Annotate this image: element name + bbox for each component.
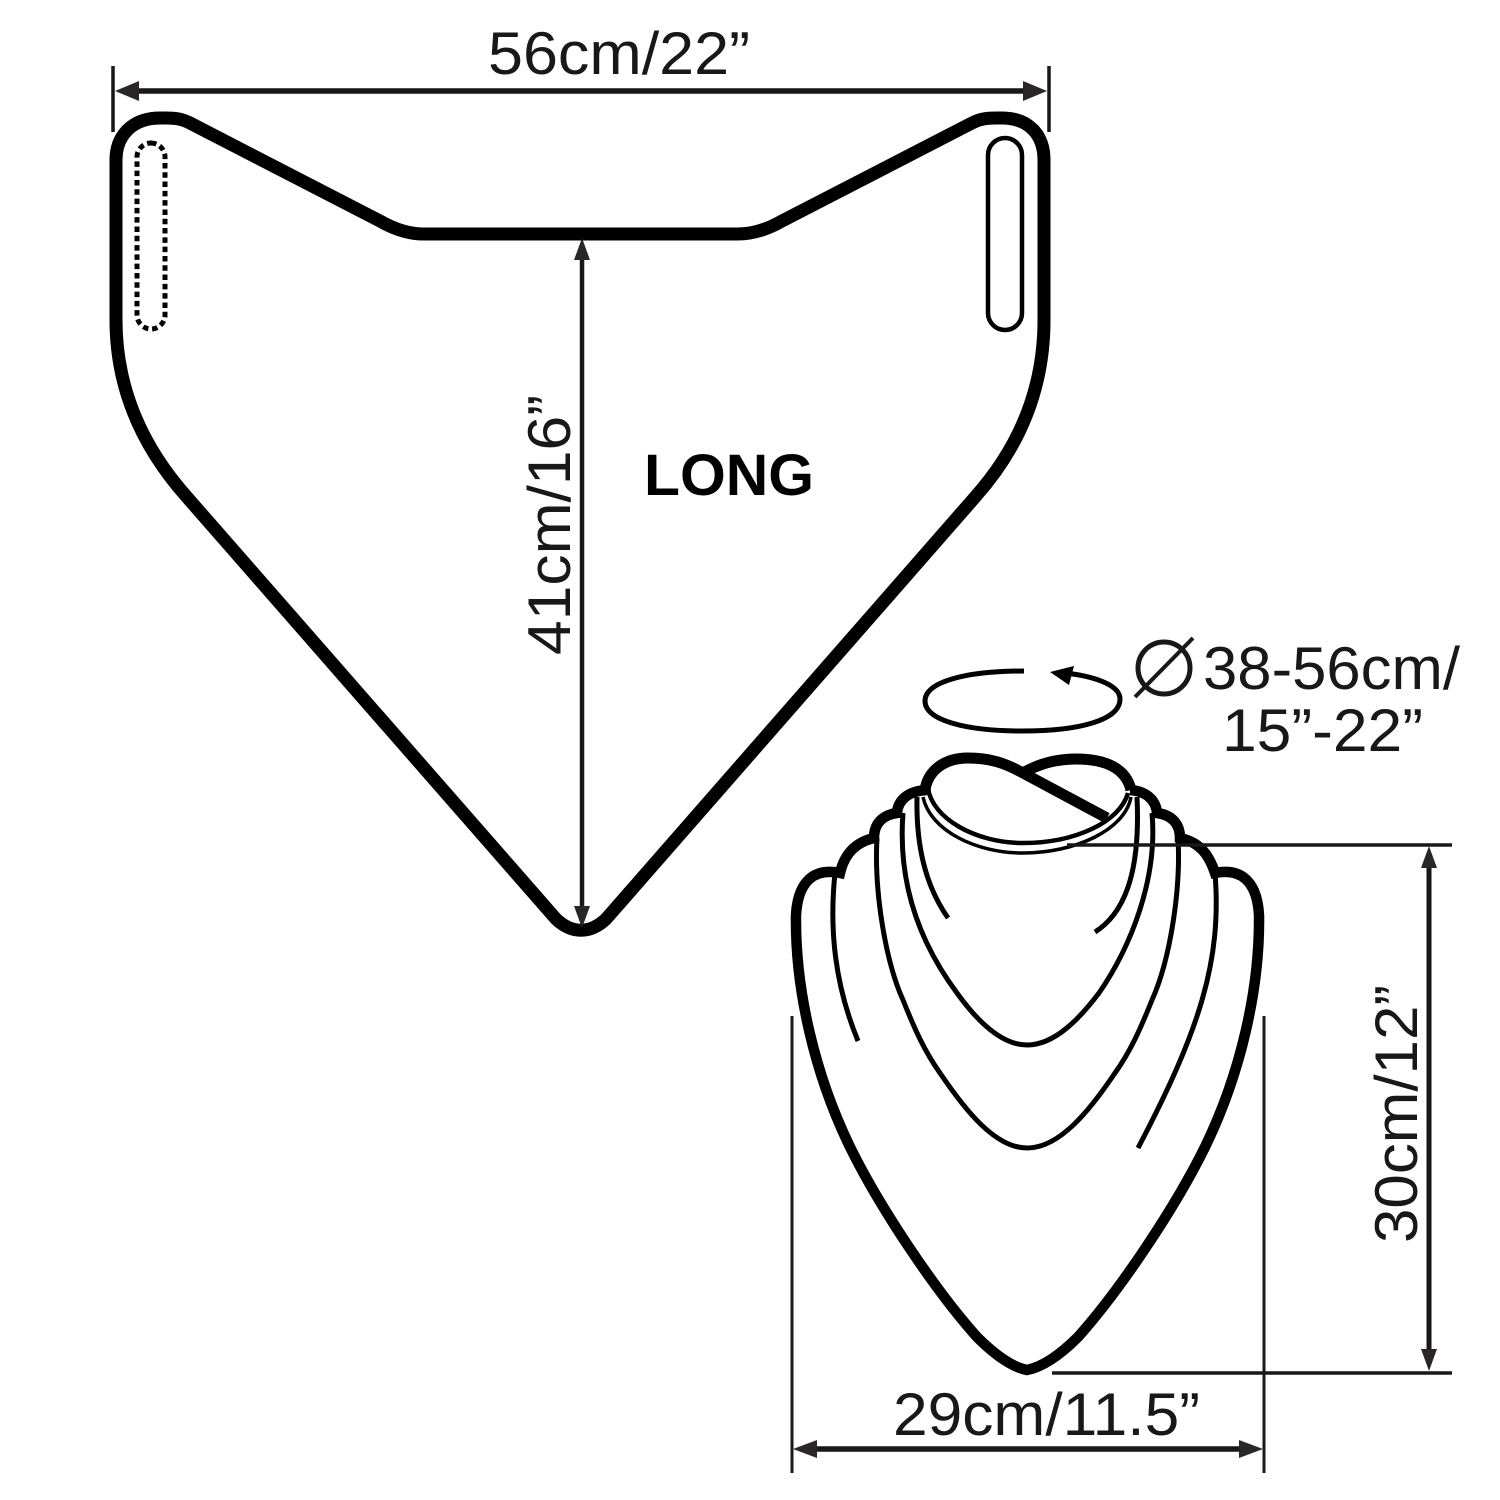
worn bandana illustration [796,758,1259,1370]
left short fold [833,873,858,1041]
long bandana flat view [116,118,1044,930]
right neck fold [1095,797,1138,932]
drop height dimension: 30cm [1052,845,1452,1373]
width dimension: 56cm: 56cm/22” [488,20,750,87]
bandana outline [116,118,1044,930]
product label: LONG [644,443,814,508]
drop height dimension: 30cm: 30cm/12” [1363,985,1430,1243]
neck top folds, thick [925,758,1107,818]
diameter symbol [1138,642,1190,694]
width dimension: 56cm [113,20,1049,132]
upper drape fold [902,813,1153,1045]
width dimension: 29cm: 29cm/11.5” [893,1381,1200,1448]
neck circumference indicator: 15”-22” [1222,697,1423,764]
height dimension: 41cm [516,238,590,928]
height dimension: 41cm: 41cm/16” [516,395,583,655]
rotation arrow [925,671,1120,731]
outer scalloped outline [796,790,1259,1370]
diameter text: 38-56cm/ [1203,635,1460,702]
left neck fold [917,797,948,918]
hidden slot, dashed [137,143,165,329]
visible slot [988,138,1022,330]
lower drape fold [877,838,1178,1148]
right long fold [1138,873,1216,1148]
neck circumference indicator [925,635,1460,764]
width dimension: 29cm [792,1016,1264,1473]
neck inner edges [928,788,1128,843]
